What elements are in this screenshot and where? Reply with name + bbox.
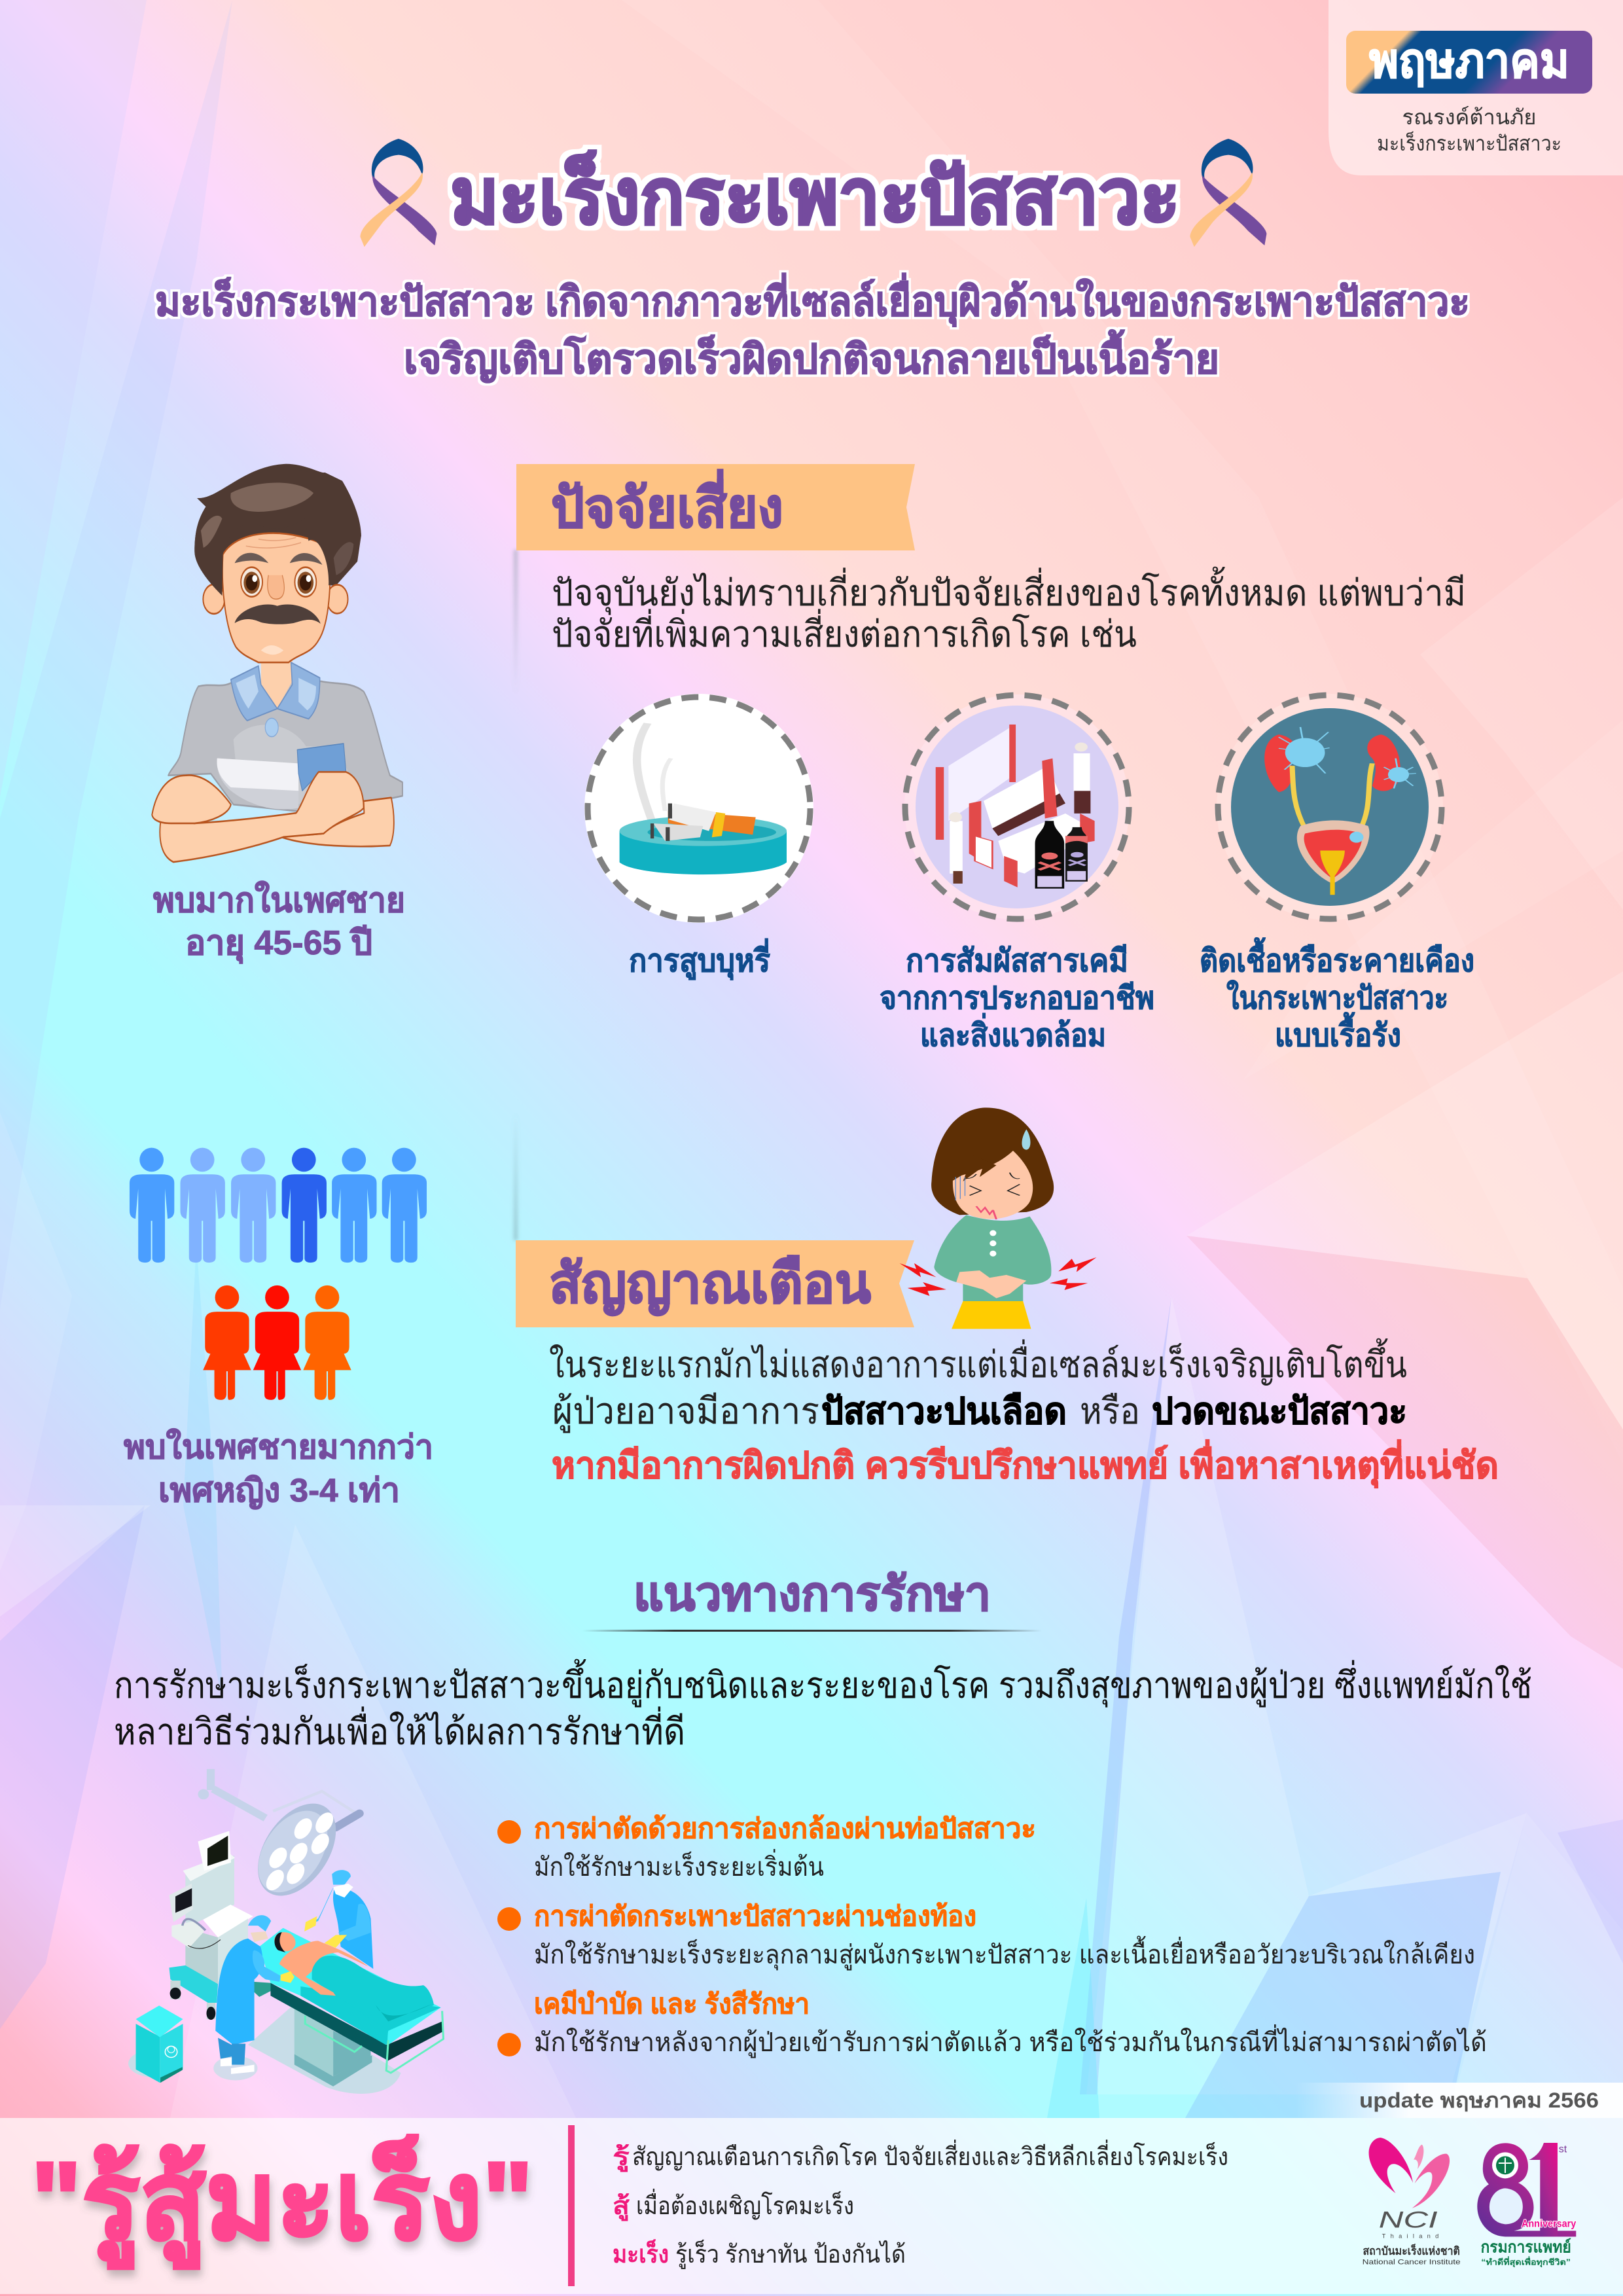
month badge: พฤษภาคม — [1369, 33, 1569, 88]
banner: warning signs: สัญญาณเตือน — [549, 1253, 871, 1317]
intro text — [155, 273, 1470, 383]
treatment 3 — [497, 1988, 1487, 2058]
risk factor labels: และสิ่งแวดล้อม — [920, 1013, 1106, 1053]
footer lines — [613, 2140, 1228, 2269]
pain marks — [899, 1257, 1096, 1296]
footer lines: มะเร็ง — [613, 2239, 669, 2269]
risk factor labels: แบบเรื้อรัง — [1275, 1012, 1401, 1053]
surgeon left — [215, 1939, 262, 2045]
warning signs paragraph: หรือ — [1080, 1390, 1140, 1431]
nose — [268, 575, 284, 599]
illustration: man with crossed arms — [152, 464, 402, 862]
hair back — [194, 464, 361, 592]
banner: warning signs — [516, 1240, 914, 1327]
update note — [1296, 2083, 1623, 2118]
footer lines: เมื่อต้องเผชิญโรคมะเร็ง — [636, 2189, 854, 2220]
patient — [279, 1941, 368, 1996]
risk factor labels: ติดเชื้อหรือระคายเคือง — [1200, 937, 1474, 978]
title: มะเร็งกระเพาะปัสสาวะ — [450, 150, 1180, 240]
ears — [203, 584, 224, 614]
pocket — [297, 744, 346, 791]
eyebrows — [235, 553, 268, 563]
pictogram: three women — [203, 1285, 351, 1400]
mustache — [235, 605, 321, 624]
text: most common in men: พบมากในเพศชาย — [153, 880, 405, 920]
text: gender ratio: เพศหญิง 3-4 เท่า — [158, 1472, 400, 1509]
illustration: operating room — [128, 1769, 444, 2094]
footer lines: รู้เร็ว รักษาทัน ป้องกันได้ — [675, 2239, 906, 2269]
campaign caption — [1377, 105, 1561, 155]
biohazard bin — [128, 2049, 183, 2077]
top-right campaign panel — [1329, 0, 1623, 175]
warning signs paragraph: ปัสสาวะปนเลือด — [821, 1390, 1067, 1431]
treatment list — [497, 1813, 1487, 2058]
warning signs paragraph: ปวดขณะปัสสาวะ — [1152, 1390, 1407, 1431]
face — [223, 533, 330, 662]
logo: 81st anniversary: Anniversary — [1522, 2219, 1577, 2230]
text: most common in men — [153, 880, 405, 964]
footer divider — [568, 2125, 575, 2286]
heading: treatment: แนวทางการรักษา — [633, 1568, 991, 1621]
chin — [261, 645, 283, 655]
logo: National Cancer Institute: National Cancer Institute — [1363, 2258, 1461, 2266]
logo: National Cancer Institute: Thailand — [1382, 2233, 1438, 2239]
banner: risk factors: ปัจจัยเสี่ยง — [551, 469, 783, 539]
warning signs paragraph: ในระยะแรกมักไม่แสดงอาการแต่เมื่อเซลล์มะเร็งเจริญเติบโตขึ้น — [549, 1338, 1407, 1386]
warning signs paragraph: หากมีอาการผิดปกติ ควรรีบปรึกษาแพทย์ เพื่อหาสาเหตุที่แน่ชัด — [552, 1439, 1499, 1488]
treatment 3: มักใช้รักษาหลังจากผู้ป่วยเข้ารับการผ่าตัดแล้ว หรือใช้ร่วมกันในกรณีที่ไม่สามารถผ่าตัดได้ — [534, 2024, 1487, 2058]
collar — [231, 666, 277, 721]
logo: National Cancer Institute: สถาบันมะเร็งแห่งชาติ — [1363, 2243, 1460, 2257]
treatment 3: เคมีบำบัด และ รังสีรักษา — [534, 1988, 810, 2019]
bed — [294, 2009, 333, 2076]
risk factor paragraph: ปัจจุบันยังไม่ทราบเกี่ยวกับปัจจัยเสี่ยงของโรคทั้งหมด แต่พบว่ามี — [552, 567, 1466, 615]
footer lines: สัญญาณเตือนการเกิดโรค ปัจจัยเสี่ยงและวิธีหลีกเลี่ยงโรคมะเร็ง — [632, 2140, 1228, 2171]
text: gender ratio: พบในเพศชายมากกว่า — [124, 1428, 433, 1465]
treatment 1 — [497, 1813, 1036, 1882]
icon: smoking — [584, 694, 813, 923]
treatment 2: มักใช้รักษามะเร็งระยะลุกลามสู่ผนังกระเพาะปัสสาวะ และเนื้อเยื่อหรืออวัยวะบริเวณใกล้เคียง — [534, 1935, 1475, 1971]
intro text: มะเร็งกระเพาะปัสสาวะ เกิดจากภาวะที่เซลล์เยื่อบุผิวด้านในของกระเพาะปัสสาวะ — [155, 273, 1470, 327]
treatment 2: การผ่าตัดกระเพาะปัสสาวะผ่านช่องท้อง — [534, 1901, 976, 1931]
icon: chemical exposure — [904, 694, 1130, 920]
logo: 81st anniversary: กรมการแพทย์ — [1480, 2238, 1571, 2257]
treatment 2 — [497, 1901, 1475, 1971]
logo: 81st anniversary — [1477, 2143, 1577, 2268]
icon: left ribbon — [360, 139, 437, 247]
treatment paragraph: หลายวิธีร่วมกันเพื่อให้ได้ผลการรักษาที่ดี — [114, 1706, 685, 1752]
lamp arm — [207, 1769, 215, 1790]
eyes — [241, 567, 316, 597]
surgical lamp — [241, 1791, 352, 1909]
risk factor paragraph: ปัจจัยที่เพิ่มความเสี่ยงต่อการเกิดโรค เช่น — [552, 609, 1137, 655]
arms — [281, 798, 394, 846]
warning signs paragraph — [549, 1338, 1499, 1488]
logo: National Cancer Institute: NCI — [1379, 2207, 1438, 2233]
risk factor labels: จากการประกอบอาชีพ — [880, 981, 1154, 1016]
logo: 81st anniversary: st — [1559, 2144, 1567, 2155]
intro text: เจริญเติบโตรวดเร็วผิดปกติจนกลายเป็นเนื้อร้าย — [404, 329, 1219, 383]
logo: 81st anniversary: “ทำดีที่สุดเพื่อทุกชีวิต” — [1481, 2256, 1571, 2268]
shirt — [168, 681, 402, 812]
campaign caption: มะเร็งกระเพาะปัสสาวะ — [1377, 131, 1561, 155]
banner: risk factors — [516, 464, 915, 550]
footer panel — [0, 2118, 1623, 2294]
text: gender ratio — [124, 1428, 433, 1509]
anesthesia machine — [185, 1856, 234, 1928]
treatment 1: การผ่าตัดด้วยการส่องกล้องผ่านท่อปัสสาวะ — [534, 1813, 1036, 1844]
treatment 1: มักใช้รักษามะเร็งระยะเริ่มต้น — [534, 1849, 824, 1882]
floor shadow — [248, 2005, 401, 2094]
update note: update พฤษภาคม 2566 — [1359, 2089, 1599, 2112]
slogan: "รู้สู้มะเร็ง" — [31, 2134, 533, 2269]
risk factor labels: การสัมผัสสารเคมี — [906, 944, 1128, 978]
logo: National Cancer Institute — [1363, 2138, 1461, 2266]
icon: bladder infection — [1217, 694, 1443, 920]
risk factor labels — [629, 937, 1474, 1053]
treatment paragraph — [114, 1659, 1532, 1752]
footer lines: รู้ — [613, 2144, 630, 2172]
surgeon right — [333, 1888, 373, 1969]
neck — [261, 651, 293, 709]
hair front — [194, 469, 361, 596]
text: most common in men: อายุ 45-65 ปี — [185, 924, 372, 964]
campaign caption: รณรงค์ต้านภัย — [1402, 105, 1537, 129]
risk factor labels: การสูบบุหรี่ — [629, 938, 770, 980]
footer lines: สู้ — [613, 2193, 630, 2221]
icon: right ribbon — [1190, 139, 1266, 247]
pictogram: six men — [130, 1148, 427, 1263]
soft divider shadows — [514, 550, 518, 694]
risk factor paragraph — [552, 567, 1466, 655]
illustration: woman in pain — [899, 1107, 1096, 1329]
warning signs paragraph: ผู้ป่วยอาจมีอาการ — [552, 1390, 819, 1433]
risk factor labels: ในกระเพาะปัสสาวะ — [1226, 979, 1448, 1016]
forehead lines — [246, 537, 301, 548]
